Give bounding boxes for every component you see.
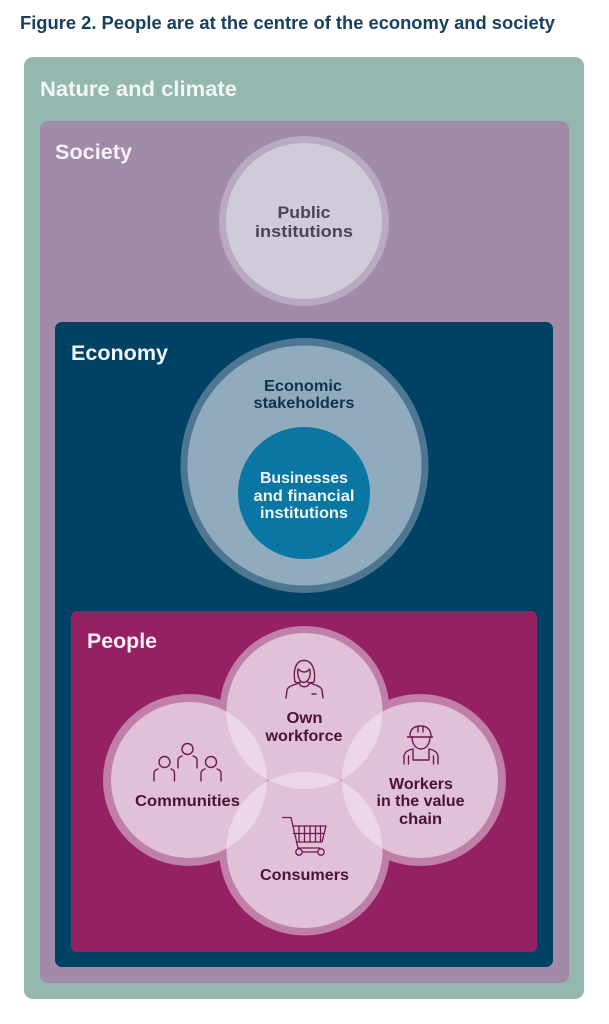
label: own workforce: workforce xyxy=(264,728,343,745)
label: workers in the value chain: chain xyxy=(399,811,442,828)
icon: worker with hard hat xyxy=(404,726,438,764)
label: workers in the value chain xyxy=(376,776,465,828)
venn overlaps xyxy=(226,712,382,848)
venn rings xyxy=(103,626,506,936)
heading: people: People xyxy=(87,630,157,653)
venn circles xyxy=(111,633,498,928)
circle: public institutions: institutions xyxy=(255,223,353,241)
title: Figure 2. People are at the centre of the economy and society xyxy=(20,12,556,33)
panel: society xyxy=(40,121,569,983)
circle: economic stakeholders xyxy=(180,338,428,593)
circle: economic stakeholders: stakeholders xyxy=(254,395,354,412)
circle: economic stakeholders: Economic xyxy=(264,378,342,395)
label: own workforce: Own xyxy=(286,710,322,727)
heading: economy: Economy xyxy=(71,342,168,365)
circle: businesses and financial institutions xyxy=(238,427,370,559)
circle: businesses and financial institutions: Businesses xyxy=(260,470,348,487)
label: workers in the value chain: in the value xyxy=(376,793,465,810)
icon: communities group xyxy=(154,744,221,781)
circle: businesses and financial institutions: and financial xyxy=(254,488,354,505)
panel: people xyxy=(71,611,537,952)
icon: own workforce woman xyxy=(286,660,323,698)
label: own workforce xyxy=(264,710,343,745)
icon: shopping cart xyxy=(282,818,326,855)
label: workers in the value chain: Workers xyxy=(389,776,453,793)
panel: economy xyxy=(55,322,553,967)
circle: public institutions xyxy=(219,136,389,306)
label: consumers: Consumers xyxy=(260,867,349,884)
circle: public institutions: Public xyxy=(278,204,330,222)
heading: nature and climate: Nature and climate xyxy=(40,78,237,101)
circle: businesses and financial institutions: institutions xyxy=(260,505,348,522)
label: communities: Communities xyxy=(135,793,240,810)
heading: society: Society xyxy=(55,141,132,164)
